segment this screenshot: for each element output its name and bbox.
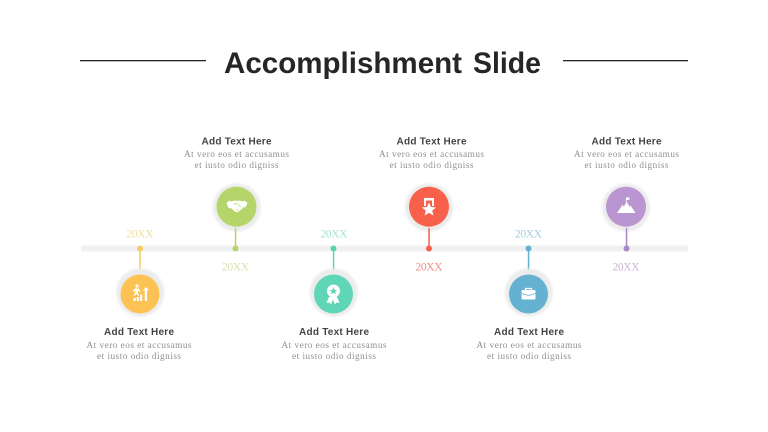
- icon badge 5: briefcase: [505, 268, 553, 316]
- connector 3: [330, 246, 336, 272]
- milestone 5: blue: [476, 228, 582, 361]
- connector 4: [426, 228, 432, 252]
- icon badge 3: award ribbon: [310, 268, 358, 316]
- text block 3: et iusto odio digniss: [292, 351, 376, 361]
- text block 5: et iusto odio digniss: [487, 351, 571, 361]
- timeline bar: [81, 246, 688, 252]
- milestone 6: purple: [574, 136, 679, 274]
- text block 2: [184, 136, 289, 170]
- text block 6: et iusto odio digniss: [584, 160, 669, 170]
- text block 4: Add Text Here: [396, 136, 467, 148]
- text block 1: At vero eos et accusamus: [86, 340, 192, 350]
- text block 2: Add Text Here: [202, 136, 272, 148]
- icon badge 4: star medal: [405, 184, 453, 232]
- connector 5: [526, 246, 532, 272]
- text block 6: [574, 136, 679, 170]
- text block 6: At vero eos et accusamus: [574, 149, 679, 159]
- connector 2: [232, 228, 238, 252]
- connector 6: [624, 228, 630, 252]
- connector 1: [137, 246, 143, 272]
- text block 2: et iusto odio digniss: [194, 160, 279, 170]
- year label 6: 20XX: [612, 262, 640, 274]
- title rule left: [80, 60, 206, 61]
- title: Accomplishment: [224, 47, 462, 80]
- text block 2: At vero eos et accusamus: [184, 149, 289, 159]
- milestone 1: yellow: [86, 228, 192, 361]
- text block 4: [379, 136, 484, 170]
- text block 5: [476, 327, 582, 361]
- year label 4: 20XX: [416, 262, 443, 274]
- text block 3: Add Text Here: [299, 327, 369, 338]
- text block 6: Add Text Here: [592, 136, 662, 148]
- year label 5: 20XX: [515, 228, 543, 240]
- icon badge 1: climbing growth: [116, 268, 164, 316]
- text block 1: [86, 327, 192, 361]
- milestone 4: red: [379, 136, 484, 274]
- milestone 2: green: [184, 136, 289, 274]
- text block 5: At vero eos et accusamus: [476, 340, 582, 350]
- year label 1: 20XX: [126, 228, 154, 240]
- text block 4: et iusto odio digniss: [390, 160, 474, 170]
- icon badge 2: handshake: [213, 184, 261, 232]
- text block 3: [282, 327, 387, 361]
- year label 2: 20XX: [222, 262, 250, 274]
- year label 3: 20XX: [320, 228, 348, 240]
- title rule right: [563, 60, 688, 61]
- text block 3: At vero eos et accusamus: [282, 340, 387, 350]
- icon badge 6: mountain flag: [602, 184, 650, 232]
- milestone 3: teal: [282, 228, 387, 361]
- title: Slide: [473, 47, 541, 80]
- text block 5: Add Text Here: [494, 327, 564, 338]
- text block 4: At vero eos et accusamus: [379, 149, 484, 159]
- text block 1: et iusto odio digniss: [97, 351, 181, 361]
- text block 1: Add Text Here: [104, 327, 174, 338]
